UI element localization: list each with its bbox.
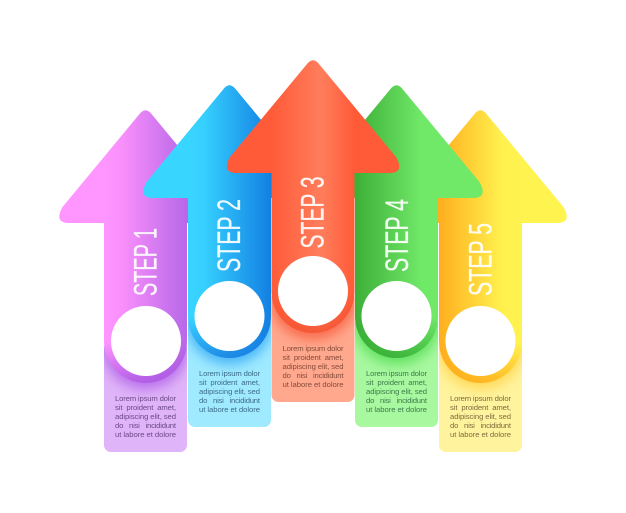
step 4 ring [355, 275, 438, 358]
step 2 description [199, 369, 261, 414]
step 3 circle shadow [272, 296, 354, 347]
step 1 description: do nisi incididunt [115, 421, 177, 430]
step 1 arrow body [59, 110, 232, 342]
step 3 arrow body [227, 60, 399, 292]
step 1 description [115, 394, 177, 439]
step 4: green arrow [354, 85, 483, 427]
step 4 white circle [362, 281, 432, 351]
step 2 white circle [194, 281, 264, 351]
step 1 description: Lorem ipsum dolor [115, 394, 176, 403]
step 5 white circle [446, 306, 516, 376]
step 3 description: Lorem ipsum dolor [282, 344, 344, 353]
step 1 description: ut labore et dolore [115, 430, 176, 439]
step 5: yellow arrow [438, 110, 567, 452]
step 4 label: STEP 4 [379, 199, 415, 272]
step 3 ring [272, 250, 354, 333]
step 5 description: adipiscing elit, sed [450, 412, 511, 421]
step 5 description: ut labore et dolore [450, 430, 511, 439]
step 2 text panel [188, 316, 271, 427]
step 5 description: Lorem ipsum dolor [450, 394, 511, 403]
step 2 circle shadow [188, 321, 271, 373]
step 5 ring [439, 300, 522, 383]
step 2 description: sit proident amet, [199, 378, 260, 387]
step 3 white circle [278, 256, 348, 326]
step 3 description: sit proident amet, [282, 353, 344, 362]
step 2 ring [188, 275, 271, 358]
step 2 label: STEP 2 [211, 199, 247, 272]
step 5 description: sit proident amet, [450, 403, 511, 412]
step 4 arrow body [310, 85, 483, 316]
step 5 description: do nisi incididunt [450, 421, 512, 430]
step 2 description: Lorem ipsum dolor [199, 369, 260, 378]
step 1 circle shadow [104, 346, 187, 396]
step 5 arrow body [394, 110, 567, 342]
step 3 description: do nisi incididunt [282, 371, 344, 380]
step 4 description: adipiscing elit, sed [366, 387, 427, 396]
step 3 description: ut labore et dolore [282, 380, 344, 389]
step 5 circle shadow [439, 346, 522, 396]
step 2 description: adipiscing elit, sed [199, 387, 260, 396]
step 1 ring [104, 300, 187, 383]
step 4 description: Lorem ipsum dolor [366, 369, 427, 378]
step 1 white circle [111, 306, 181, 376]
step 4 description: do nisi incididunt [366, 396, 428, 405]
step 1 description: sit proident amet, [115, 403, 176, 412]
step 2 description: ut labore et dolore [199, 405, 260, 414]
step 2: blue arrow [143, 85, 272, 427]
step 1 description: adipiscing elit, sed [115, 412, 176, 421]
step 4 text panel [355, 316, 438, 427]
step 3 description: adipiscing elit, sed [282, 362, 344, 371]
step 4 description: ut labore et dolore [366, 405, 427, 414]
step 3 description [282, 344, 344, 389]
step 4 circle shadow [355, 321, 438, 371]
step 1 label: STEP 1 [128, 228, 164, 296]
step 3 label: STEP 3 [294, 176, 330, 248]
step 1: purple arrow [59, 110, 188, 452]
step 1 text panel [104, 342, 187, 452]
step 3 text panel [272, 292, 354, 402]
step 4 description [366, 369, 428, 414]
step 3: red-orange arrow [227, 60, 399, 402]
step 4 description: sit proident amet, [366, 378, 427, 387]
step 2 arrow body [143, 85, 316, 316]
step 5 label: STEP 5 [462, 223, 498, 296]
step 5 text panel [439, 342, 522, 452]
step 2 description: do nisi incididunt [199, 396, 261, 405]
step 5 description [450, 394, 512, 439]
